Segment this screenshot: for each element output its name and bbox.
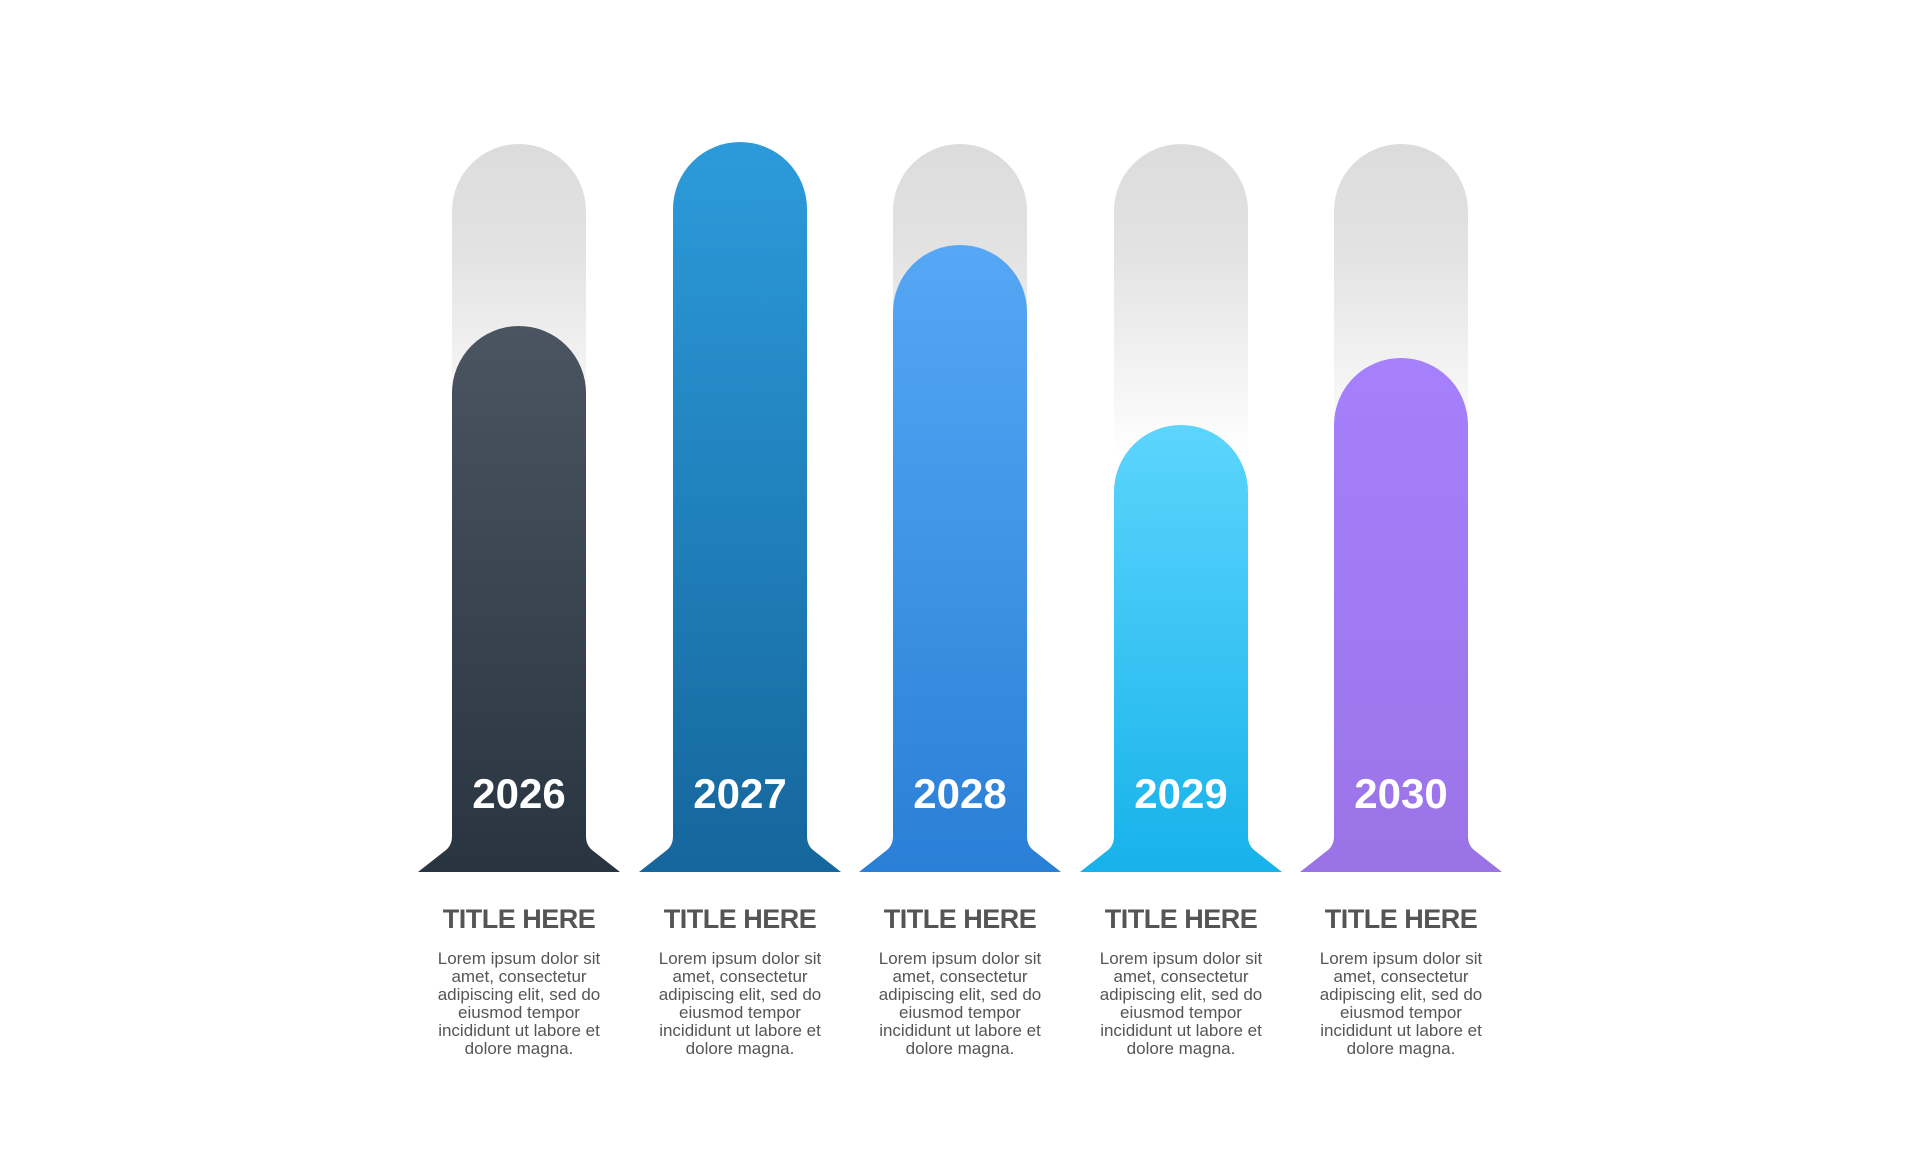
text block 3: Lorem ipsum dolor sit — [879, 949, 1042, 968]
text block 3: adipiscing elit, sed do — [879, 985, 1041, 1004]
bar 2030: 2030 — [1354, 770, 1448, 817]
text block 3: amet, consectetur — [892, 967, 1028, 986]
text block 3: TITLE HERE — [884, 904, 1036, 934]
text block 2: amet, consectetur — [672, 967, 808, 986]
bar 2029: 2029 — [1134, 770, 1228, 817]
text block 3: dolore magna. — [906, 1039, 1014, 1058]
bar 2029 — [1080, 144, 1282, 872]
text block 1: adipiscing elit, sed do — [438, 985, 600, 1004]
bar 2027 — [639, 142, 841, 872]
text block 4: adipiscing elit, sed do — [1100, 985, 1262, 1004]
text block 4: incididunt ut labore et — [1100, 1021, 1262, 1040]
text block 5: eiusmod tempor — [1340, 1003, 1462, 1022]
text block 4: dolore magna. — [1127, 1039, 1235, 1058]
text block 3: eiusmod tempor — [899, 1003, 1021, 1022]
text block 5: amet, consectetur — [1333, 967, 1469, 986]
text block 2 — [659, 904, 822, 1058]
text block 1: eiusmod tempor — [458, 1003, 580, 1022]
text block 5: incididunt ut labore et — [1320, 1021, 1482, 1040]
text block 2: eiusmod tempor — [679, 1003, 801, 1022]
bar 2028: 2028 — [913, 770, 1007, 817]
text block 4: Lorem ipsum dolor sit — [1100, 949, 1263, 968]
text block 4: amet, consectetur — [1113, 967, 1249, 986]
text block 1: Lorem ipsum dolor sit — [438, 949, 601, 968]
text block 4 — [1100, 904, 1263, 1058]
bar 2028 — [859, 144, 1061, 872]
text block 1: dolore magna. — [465, 1039, 573, 1058]
text block 2: adipiscing elit, sed do — [659, 985, 821, 1004]
text block 5: adipiscing elit, sed do — [1320, 985, 1482, 1004]
text block 2: Lorem ipsum dolor sit — [659, 949, 822, 968]
bar 2027: 2027 — [693, 770, 787, 817]
text block 1: amet, consectetur — [451, 967, 587, 986]
text block 3 — [879, 904, 1042, 1058]
text block 1 — [438, 904, 601, 1058]
bar 2030 — [1300, 144, 1502, 872]
bar 2026: 2026 — [472, 770, 566, 817]
text block 5: Lorem ipsum dolor sit — [1320, 949, 1483, 968]
text block 3: incididunt ut labore et — [879, 1021, 1041, 1040]
text block 5: TITLE HERE — [1325, 904, 1477, 934]
text block 2: TITLE HERE — [664, 904, 816, 934]
text block 1: TITLE HERE — [443, 904, 595, 934]
text block 5 — [1320, 904, 1483, 1058]
bar 2026 — [418, 144, 620, 872]
text block 5: dolore magna. — [1347, 1039, 1455, 1058]
text block 2: incididunt ut labore et — [659, 1021, 821, 1040]
text block 4: eiusmod tempor — [1120, 1003, 1242, 1022]
text block 1: incididunt ut labore et — [438, 1021, 600, 1040]
text block 2: dolore magna. — [686, 1039, 794, 1058]
text block 4: TITLE HERE — [1105, 904, 1257, 934]
